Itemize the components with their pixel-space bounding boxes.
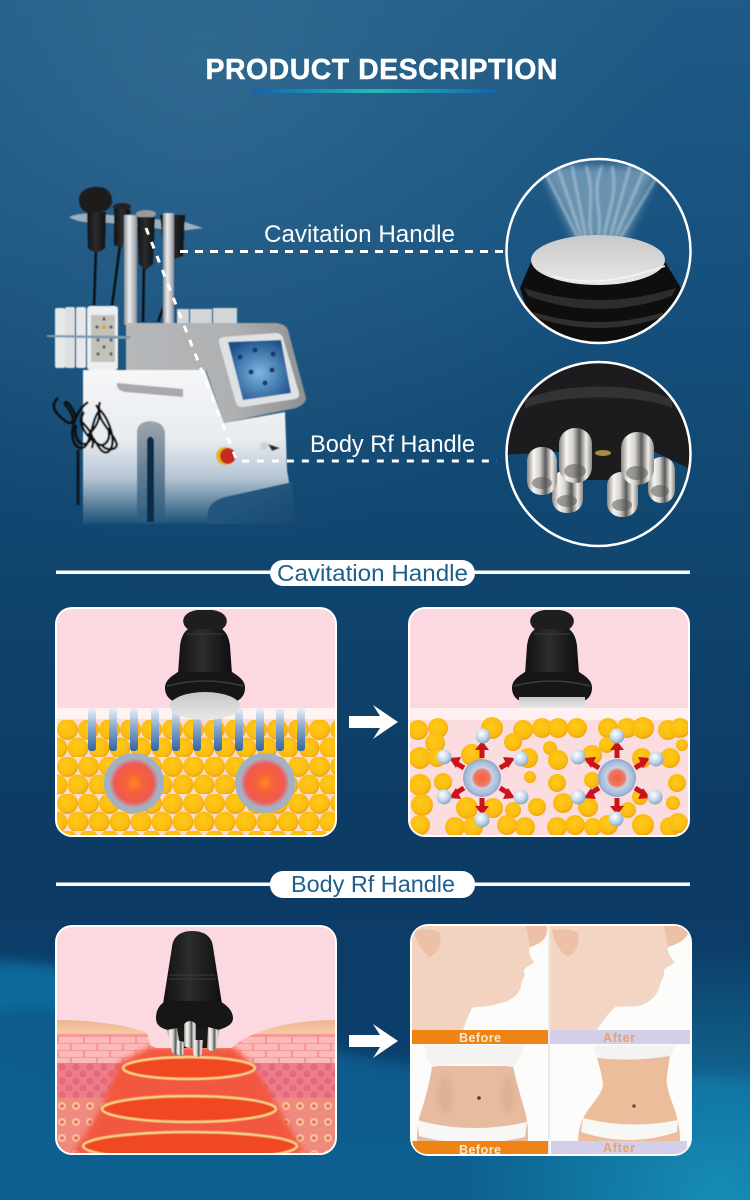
heated fat cells [104, 753, 295, 813]
handle 4 [160, 215, 185, 262]
before label 2 [412, 1141, 548, 1154]
handle bar [117, 383, 183, 397]
dome [505, 362, 692, 470]
fat cells [57, 720, 335, 836]
head base [520, 262, 681, 350]
after label 2 [551, 1141, 687, 1155]
before label 1: Before [459, 1031, 501, 1045]
cables [90, 245, 166, 425]
fat cells [408, 717, 690, 837]
ear and nose details [414, 926, 690, 957]
slot [137, 421, 165, 522]
heat rings [83, 1057, 297, 1160]
red arrows [456, 748, 643, 808]
side knob [260, 442, 280, 451]
poles [124, 213, 174, 325]
front pads [55, 306, 118, 370]
smoke mist [540, 165, 660, 240]
dashed leader: cavitation handle [180, 250, 503, 253]
rear pads [177, 308, 237, 323]
handle [165, 610, 245, 720]
shrinking cells [463, 759, 636, 797]
label: body rf handle: Body Rf Handle [310, 431, 475, 458]
circle: body rf handle head [505, 362, 692, 546]
torso before [417, 1045, 528, 1143]
emergency button [216, 447, 236, 465]
released droplets [436, 728, 664, 828]
title: PRODUCT DESCRIPTION [206, 54, 558, 86]
lower dark panel [207, 482, 296, 524]
divider: cavitation handle [56, 560, 690, 586]
after label 1: After [603, 1031, 635, 1045]
neck before [412, 926, 547, 1030]
machine illustration [47, 187, 306, 524]
panel: before and after photos [410, 924, 692, 1157]
handle [156, 931, 233, 1057]
divider: body rf handle [56, 871, 690, 898]
ultrasonic bars [88, 708, 305, 751]
torso after [578, 1045, 680, 1141]
handle 1 [79, 187, 112, 252]
panel: rf treatment [55, 925, 337, 1160]
panel: cavitation before [55, 607, 337, 837]
handle 2 [113, 203, 131, 248]
panel: cavitation after [408, 607, 690, 837]
before label 1 [412, 1030, 548, 1045]
skin layers [55, 1015, 337, 1155]
label: cavitation handle: Cavitation Handle [264, 221, 455, 248]
screen [219, 333, 299, 407]
pad tray [47, 335, 130, 339]
dashed leader: body rf handle [146, 228, 497, 461]
title underline [252, 89, 497, 93]
handle 3 [136, 210, 156, 270]
handle [512, 610, 592, 708]
console top [126, 323, 306, 423]
arrow [349, 1024, 398, 1058]
divider: body rf handle: Body Rf Handle [291, 871, 455, 897]
after label 1 [550, 1030, 690, 1045]
silver disc [531, 235, 665, 285]
before label 2: Before [459, 1143, 501, 1157]
cable bundle [54, 398, 117, 505]
after label 2: After [603, 1141, 635, 1155]
pins [527, 428, 675, 517]
divider: cavitation handle: Cavitation Handle [277, 560, 468, 586]
white body [83, 370, 296, 524]
neck after [550, 926, 690, 1030]
tray plate [69, 213, 203, 231]
arrow [349, 705, 398, 739]
circle: cavitation handle head [506, 159, 690, 350]
